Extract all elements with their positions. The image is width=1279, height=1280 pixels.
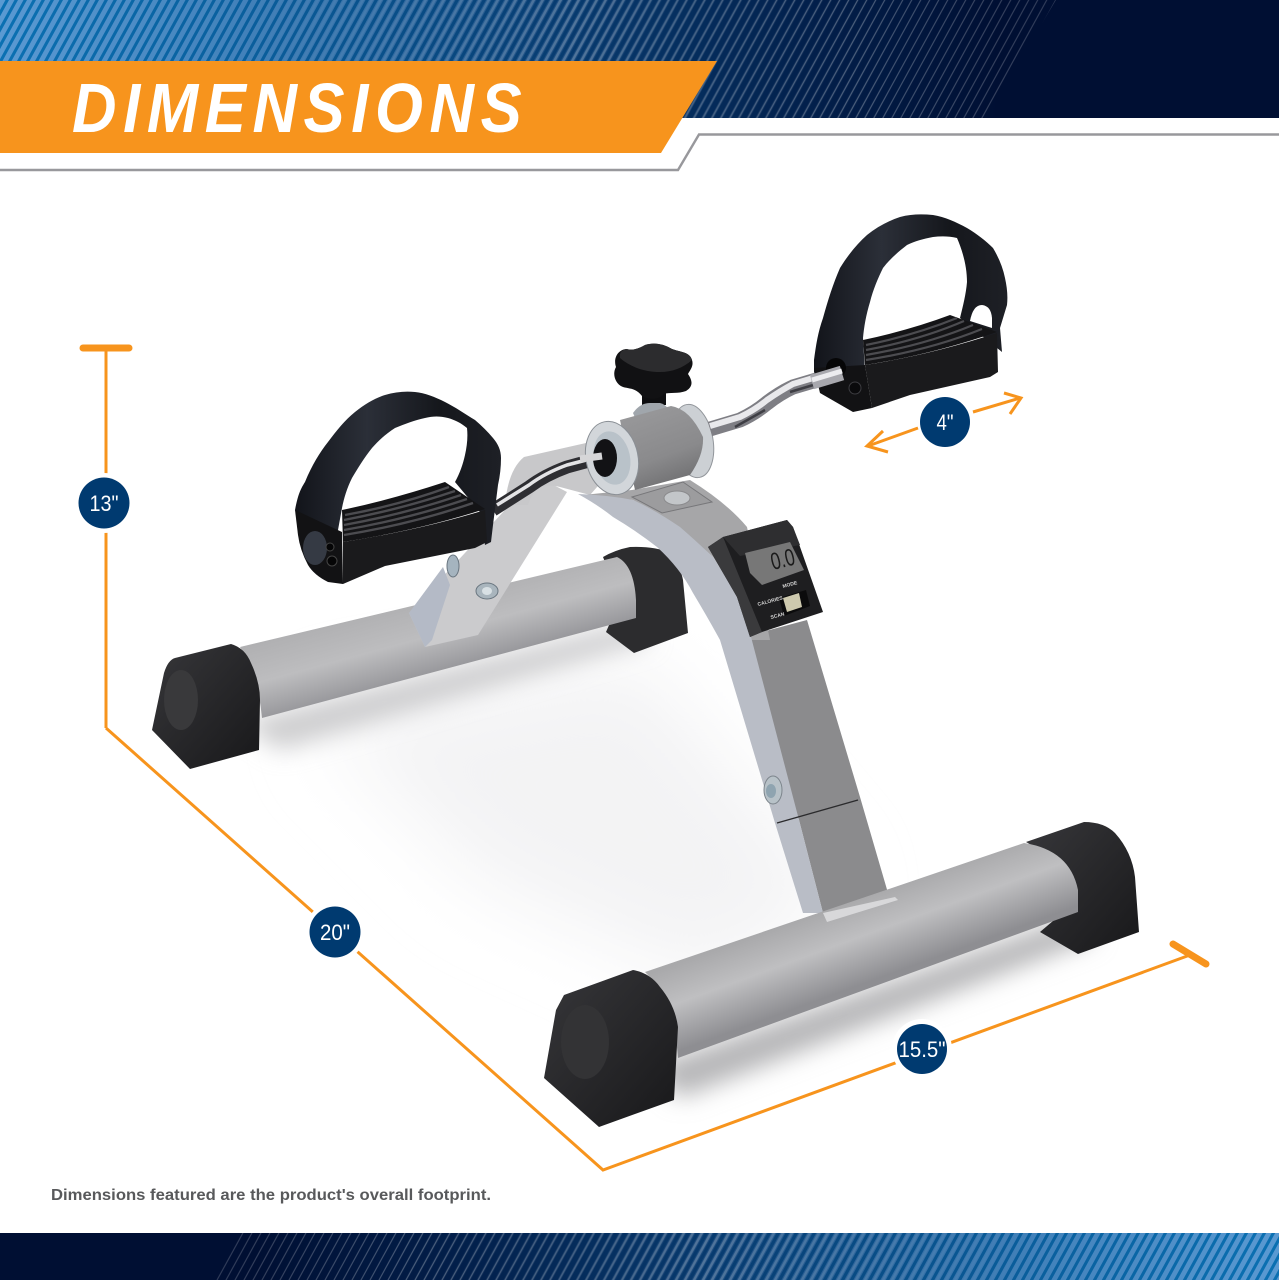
monitor labels: CALORIES xyxy=(757,595,784,608)
arch upper face xyxy=(583,480,770,640)
front foot right cap xyxy=(1026,822,1139,954)
badge 15.5 inch: 15.5" xyxy=(898,1037,946,1062)
badge 20 inch xyxy=(305,902,365,962)
left pedal hub xyxy=(295,510,343,584)
monitor labels: MODE xyxy=(782,580,799,590)
badge 4 inch xyxy=(920,397,970,447)
arch plate with rivet xyxy=(632,482,712,513)
front foot left cap xyxy=(544,970,678,1127)
LCD screen: 0.0 xyxy=(768,544,798,576)
right crank rod xyxy=(710,373,830,429)
monitor labels: SCAN xyxy=(770,611,786,621)
pivot housing xyxy=(579,401,719,500)
header band xyxy=(0,0,1279,118)
badge 13 inch: 13" xyxy=(90,491,118,516)
rear tube xyxy=(240,557,636,718)
knob xyxy=(614,344,693,427)
left crank rod xyxy=(493,457,600,510)
right pedal hole xyxy=(970,305,992,328)
footer band xyxy=(0,1233,1279,1280)
badge 13 inch xyxy=(74,473,134,533)
width arrow 4 inch xyxy=(867,393,1021,452)
upright seam and bolt xyxy=(764,776,858,823)
title: DIMENSIONS xyxy=(72,68,522,147)
right pedal tread xyxy=(863,315,997,365)
digital monitor xyxy=(708,520,823,637)
monitor labels xyxy=(757,580,799,621)
right pedal xyxy=(812,214,1007,412)
rear strut xyxy=(409,478,567,647)
badge 15.5 inch xyxy=(892,1019,952,1079)
left pedal tread xyxy=(342,482,485,542)
footnote: Dimensions featured are the product's overall footprint. xyxy=(51,1187,491,1204)
dimension lines xyxy=(83,348,1206,1170)
arch light edge band xyxy=(578,494,823,913)
floor shadows xyxy=(240,620,1095,1098)
title banner xyxy=(0,61,717,153)
badge 20 inch: 20" xyxy=(320,920,350,945)
front upright lower dark face xyxy=(744,620,888,913)
rear foot right cap xyxy=(603,547,688,653)
rear foot left cap xyxy=(152,644,260,769)
weld plate xyxy=(823,897,898,922)
arch top behind pivot xyxy=(505,443,612,505)
product: pedal exerciser xyxy=(152,214,1139,1127)
header grey rule xyxy=(0,134,1279,170)
left pedal xyxy=(295,392,501,584)
badge 4 inch: 4" xyxy=(936,410,954,435)
right pedal hub xyxy=(812,358,872,412)
monitor button xyxy=(779,590,810,616)
front tube xyxy=(645,843,1078,1058)
